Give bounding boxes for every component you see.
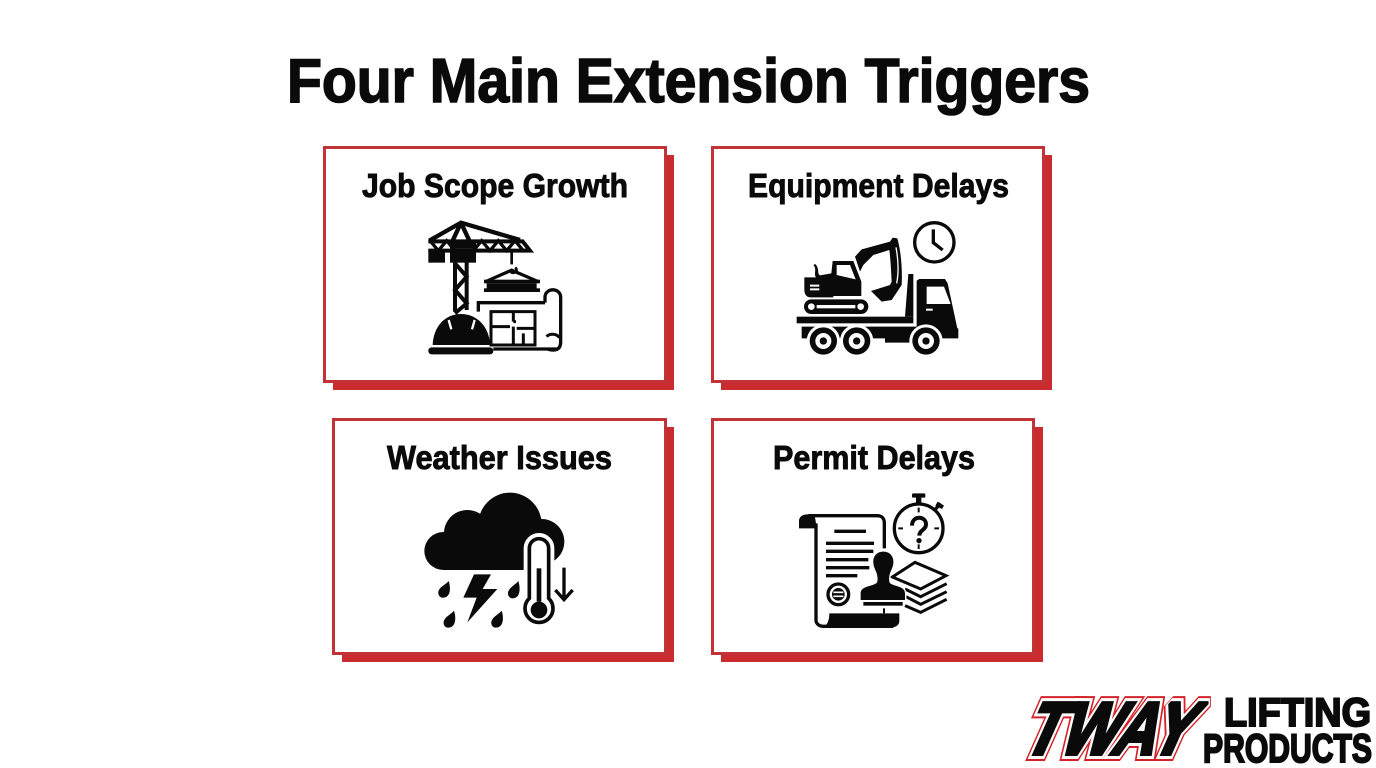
logo: Tway Lifting Products — [1013, 688, 1372, 768]
logo mark: TWAY: TWAY — [1013, 688, 1215, 768]
heading: weather issues: Weather Issues — [387, 439, 612, 476]
logo text: lifting: LIFTING — [1224, 691, 1371, 735]
panel: permit delays — [712, 420, 1043, 662]
icon: storm cloud with thermometer — [424, 493, 573, 628]
heading: equipment delays: Equipment Delays — [748, 167, 1009, 204]
panel: equipment delays — [712, 148, 1052, 390]
heading: job scope growth: Job Scope Growth — [362, 167, 628, 204]
heading: permit delays: Permit Delays — [773, 439, 975, 476]
icon: crane, helmet and blueprint — [428, 223, 561, 354]
logo mark: TWAY: TWAY — [1013, 688, 1215, 768]
title: Four Main Extension Triggers — [287, 47, 1090, 116]
panel: job scope growth — [324, 148, 674, 390]
icon: permit scroll, stamp, stopwatch and papers — [799, 493, 947, 627]
panel: weather issues — [334, 420, 674, 662]
logo mark: TWAY: TWAY — [1013, 688, 1215, 768]
icon: excavator on truck with clock — [797, 223, 958, 358]
